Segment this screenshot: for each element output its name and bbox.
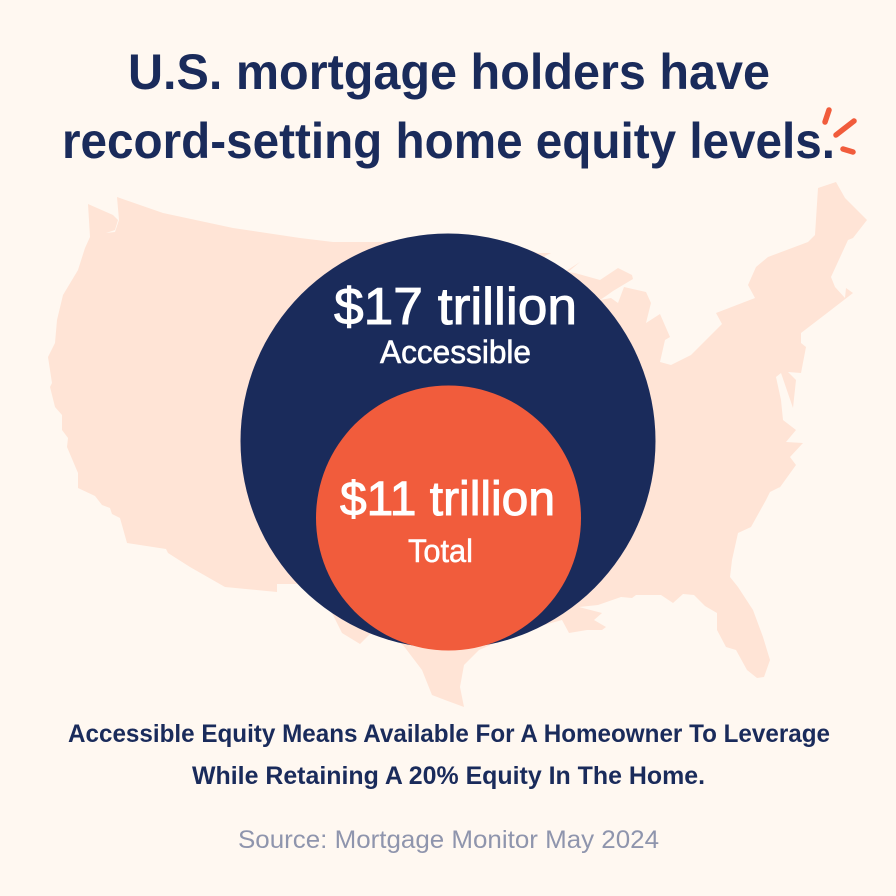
- title: record-setting home equity levels.: [62, 113, 835, 169]
- caption: [68, 720, 830, 790]
- map: United States silhouette: [48, 182, 867, 707]
- chart: accessible equity circle: [240, 234, 656, 648]
- total equity label: Total: [408, 533, 473, 569]
- caption: Accessible Equity Means Available For A Homeowner To Leverage: [68, 720, 830, 748]
- accessible equity value: $17 trillion: [334, 278, 577, 336]
- caption: While Retaining A 20% Equity In The Home.: [192, 762, 705, 790]
- title: U.S. mortgage holders have: [128, 44, 770, 100]
- icon: sparkle accent: [825, 110, 854, 152]
- source note: Source: Mortgage Monitor May 2024: [238, 826, 659, 854]
- total equity value: $11 trillion: [340, 473, 555, 526]
- title: [62, 44, 835, 169]
- accessible equity label: Accessible: [380, 334, 531, 370]
- chart: total equity circle: [316, 386, 581, 650]
